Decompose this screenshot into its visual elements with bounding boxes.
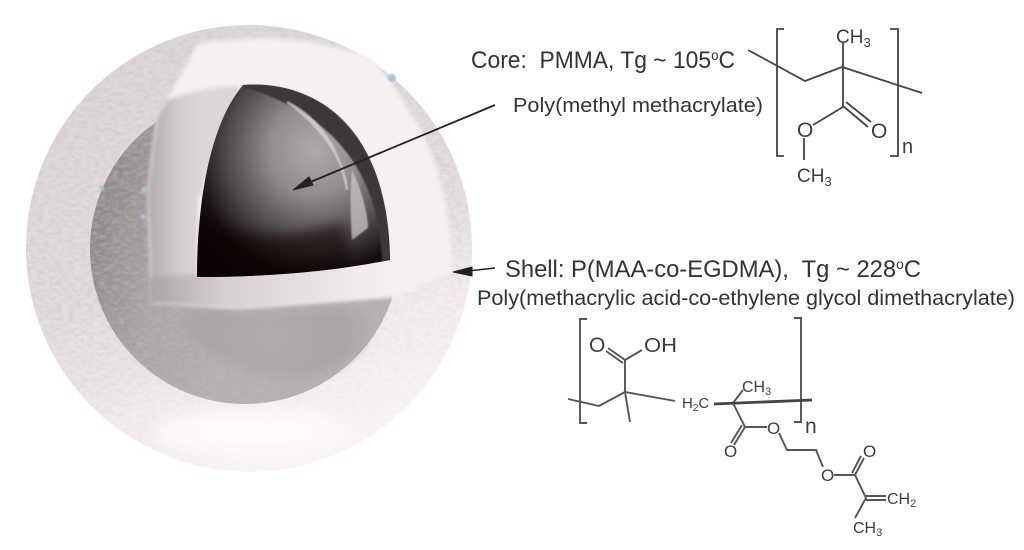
copolymer atoms: 2: [693, 403, 699, 414]
copolymer atoms: O: [767, 419, 780, 438]
copolymer atoms: n: [805, 415, 817, 438]
copolymer atoms: CH: [887, 491, 910, 508]
copolymer atoms: CH: [742, 379, 765, 396]
copolymer atoms: O: [863, 442, 876, 461]
core label: o: [711, 47, 719, 63]
core polymer name: Poly(methyl methacrylate): [513, 95, 763, 117]
thick backbone bond: [714, 400, 812, 404]
PMMA atoms: O: [871, 120, 887, 143]
PMMA atoms: CH: [836, 27, 863, 48]
PMMA bonds: [748, 29, 922, 160]
core label: Core: PMMA, Tg ~ 105: [471, 47, 723, 74]
copolymer atoms: O: [724, 442, 737, 461]
lower cut face shading: [150, 258, 397, 309]
bright lower rim: [162, 412, 327, 448]
copolymer atoms: O: [589, 334, 605, 357]
hollow shell cavity: [90, 94, 400, 404]
copolymer bonds: [568, 318, 886, 518]
PMMA structure: [748, 27, 922, 189]
shell label: C: [904, 256, 921, 283]
arrow: core: [293, 105, 495, 190]
PMMA atoms: 3: [863, 35, 871, 50]
outer textured shell: [26, 25, 472, 471]
copolymer atoms: OH: [644, 335, 677, 357]
left cut face: [148, 85, 240, 303]
copolymer atoms: 3: [765, 386, 771, 398]
cut shell faces: [148, 38, 452, 308]
core label: C: [718, 47, 735, 74]
copolymer atoms: [589, 334, 916, 539]
copolymer atoms: O: [821, 466, 834, 485]
shell label: Shell: P(MAA-co-EGDMA), Tg ~ 228: [505, 256, 900, 283]
lower shell fade: [25, 24, 473, 472]
PMMA atoms: [797, 27, 913, 189]
core-shell sphere illustration: [25, 24, 473, 472]
core sphere section: [197, 84, 390, 277]
shell label: o: [896, 256, 904, 272]
copolymer atoms: 3: [876, 527, 882, 539]
copolymer atoms: C: [698, 395, 709, 412]
arrow: shell: [453, 267, 495, 276]
blue specks: [100, 74, 396, 220]
core shading: [197, 84, 390, 277]
cavity floor highlight: [160, 310, 390, 378]
shell polymer name: Poly(methacrylic acid-co-ethylene glycol dimethacrylate): [477, 287, 1015, 310]
PMMA atoms: O: [797, 119, 813, 142]
PMMA atoms: 3: [824, 174, 832, 189]
core highlight patch: [350, 170, 368, 240]
PMMA atoms: n: [902, 136, 913, 158]
PMMA atoms: CH: [797, 166, 824, 187]
P(MAA-co-EGDMA) structure: [568, 318, 916, 539]
core lower shadow: [197, 225, 350, 280]
core dark rim: [243, 85, 390, 262]
core highlight arc: [287, 102, 347, 190]
copolymer atoms: 2: [910, 498, 916, 510]
copolymer atoms: CH: [853, 520, 876, 537]
copolymer atoms: H: [682, 395, 693, 412]
